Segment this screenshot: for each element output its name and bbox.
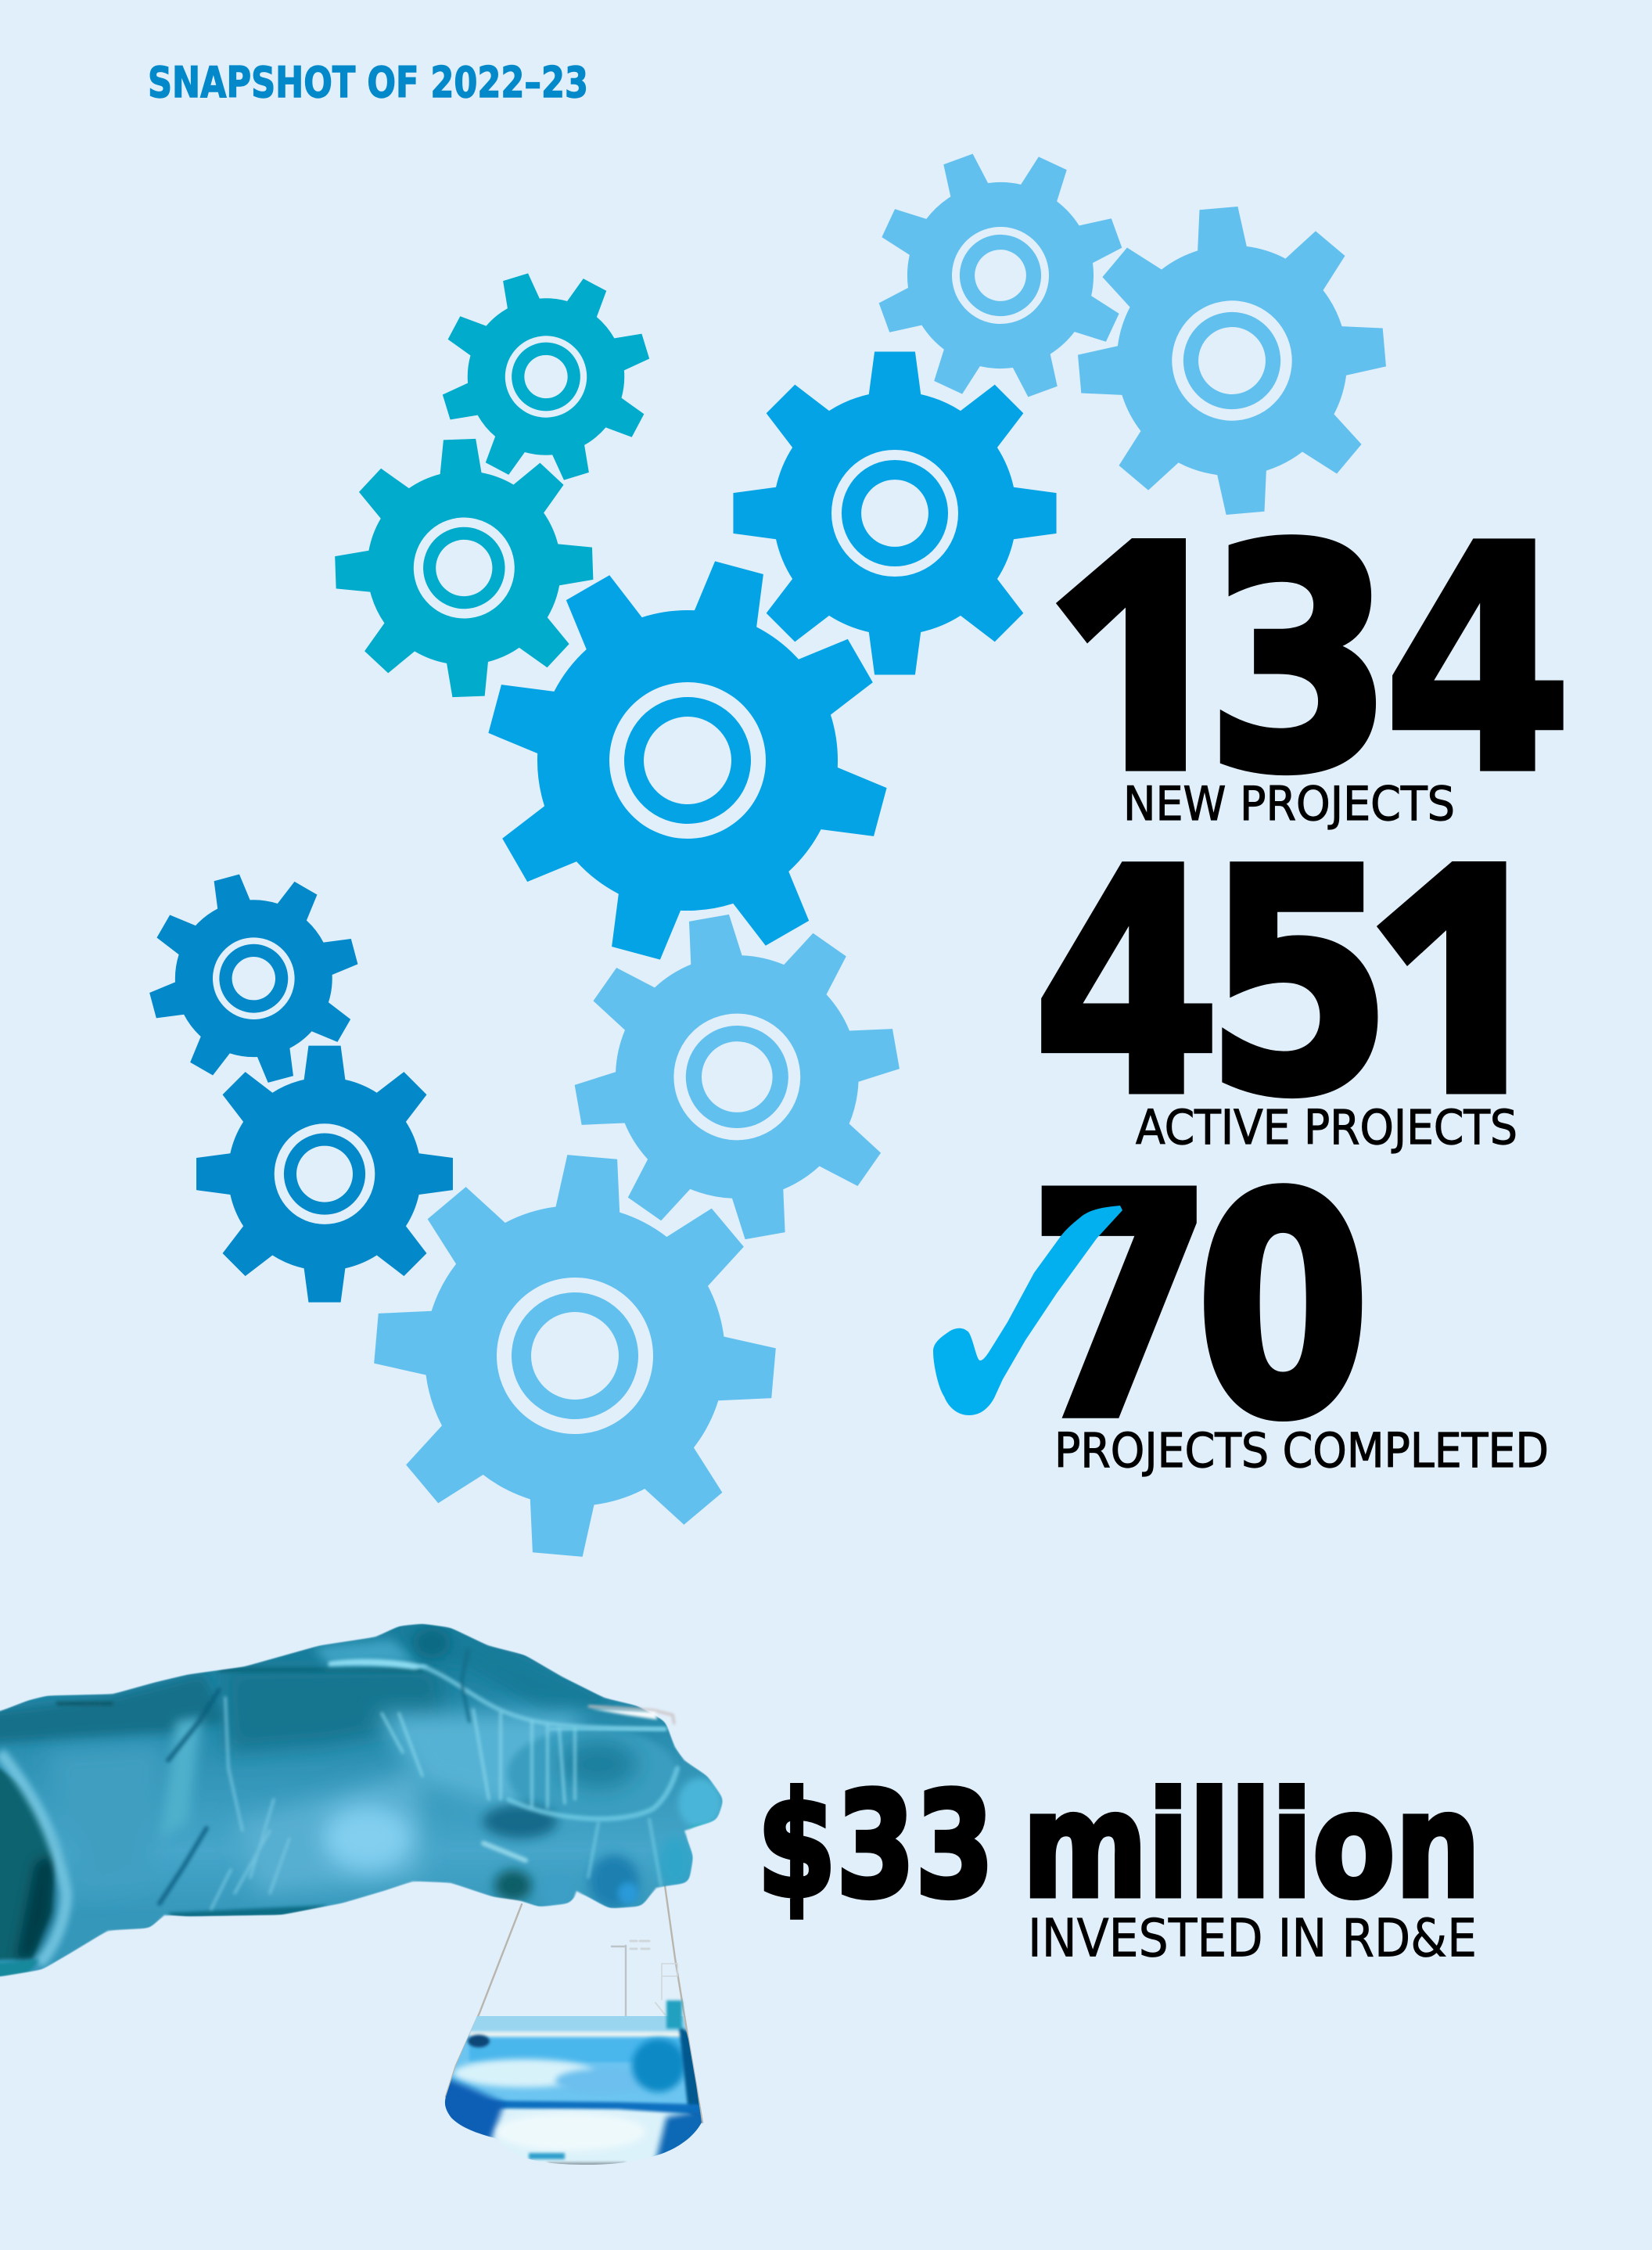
title: SNAPSHOT OF 2022–23 (148, 58, 588, 107)
icon: gear, light blue, top right (1066, 195, 1398, 527)
icon: gear, small light blue, top (842, 117, 1159, 434)
icon: gear, mid blue, top (733, 351, 1057, 675)
icon: tick (933, 1206, 1122, 1415)
stat: 70 projects completed: 7 (1027, 1129, 1215, 1487)
illustration: gloved hand holding a flask (0, 1612, 751, 2176)
icon: gear, large light blue, bottom (359, 1140, 791, 1572)
stat: 134 new projects: 1 (1009, 474, 1228, 841)
stat: $33 million invested (757, 1761, 1481, 1968)
label: active projects: ACTIVE PROJECTS (1136, 1100, 1517, 1156)
stat: 70 projects completed (1027, 1129, 1549, 1487)
thumb (506, 1731, 673, 1813)
stat: 134 new projects: 3 (1205, 481, 1394, 840)
label: new projects: NEW PROJECTS (1123, 777, 1455, 832)
flask rim highlight (549, 1706, 674, 1729)
stat: 451 active projects: 5 (1205, 804, 1393, 1163)
stat: 451 active projects: 1 (1330, 797, 1549, 1164)
stat: 451 active projects: 4 (1032, 804, 1221, 1163)
icon: gear, small teal (416, 246, 676, 507)
stat: 134 new projects: 4 (1384, 481, 1572, 840)
label: projects completed: PROJECTS COMPLETED (1054, 1423, 1549, 1479)
cuff (0, 1760, 56, 1961)
stat: 451 active projects (1041, 861, 1516, 1154)
flask sight tube (666, 2000, 682, 2029)
glove (0, 1623, 723, 1978)
stat: 134 new projects (1056, 534, 1564, 830)
label: invested in RD&E: INVESTED IN RD&E (1028, 1907, 1477, 1968)
icon: gear, large mid blue, centre (444, 516, 932, 1005)
icon: gear, light blue, lower centre (550, 890, 924, 1263)
stat: $33 million invested: million (1022, 1761, 1481, 1930)
lower fingers (483, 1804, 558, 1838)
stat: 70 projects completed: 0 (1197, 1134, 1369, 1483)
icon: gear, dark blue (196, 1046, 453, 1303)
icon: gear, teal (331, 435, 597, 701)
flask liquid (444, 2016, 702, 2165)
stat: $33 million invested: $33 (757, 1761, 994, 1930)
icon: gear, small dark blue (126, 850, 382, 1106)
flask glass (446, 1885, 702, 2122)
